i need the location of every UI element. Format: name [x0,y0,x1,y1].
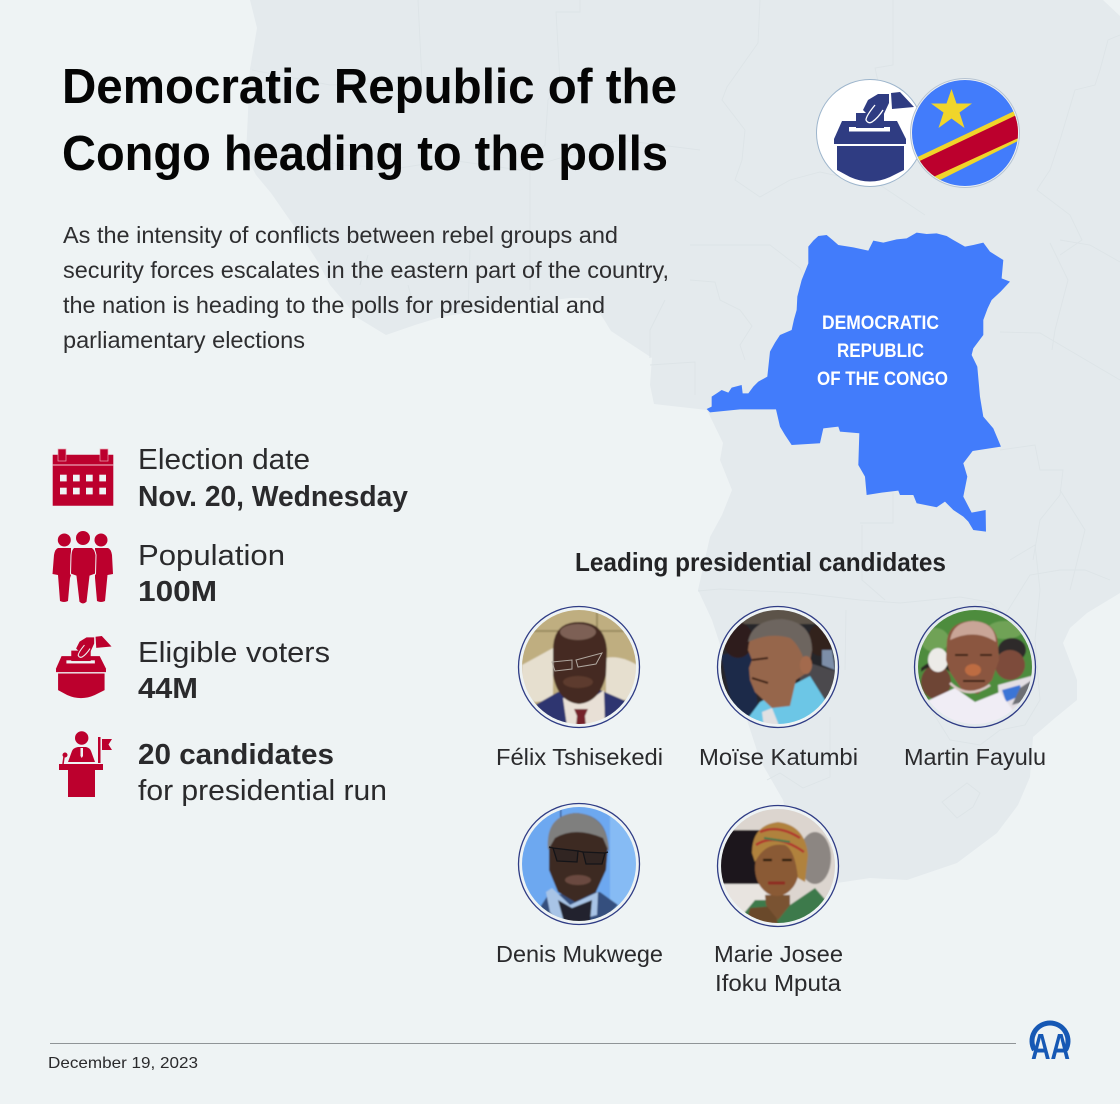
intro paragraph: security forces escalates in the eastern part of the country, [63,257,669,283]
stat: presidential candidates [59,731,387,807]
icon: ballot box [56,636,112,698]
candidate: Marie Josee Ifoku Mputa: Marie Josee [714,941,843,967]
stat: election date: Nov. 20, Wednesday [138,481,408,513]
icon: calendar [53,449,113,506]
stat: population: Population [138,540,285,572]
title [62,60,677,181]
candidate: Félix Tshisekedi: Félix Tshisekedi [496,744,663,770]
stat: population [52,531,285,608]
candidate: Félix Tshisekedi [496,606,663,770]
portrait [914,606,1036,728]
intro paragraph: the nation is heading to the polls for presidential and [63,292,605,318]
portrait [718,806,838,926]
stat: eligible voters: Eligible voters [138,637,330,669]
map label [817,313,948,390]
stat: eligible voters: 44M [138,673,198,705]
candidate: Marie Josee Ifoku Mputa: Ifoku Mputa [715,970,841,996]
background map of Africa [246,0,1120,883]
map label: REPUBLIC [837,341,924,362]
portrait [518,804,640,925]
map label: DEMOCRATIC [822,313,939,334]
stat: presidential candidates: for presidential run [138,775,387,807]
map: Democratic Republic of the Congo [707,233,1010,532]
candidate: Denis Mukwege: Denis Mukwege [496,941,663,967]
stat: presidential candidates: 20 candidates [138,739,334,771]
icon: speaker at podium [59,731,112,797]
icon: DRC flag badge [910,78,1020,188]
portrait [518,606,640,730]
stat: election date: Election date [138,444,310,476]
portrait [718,606,838,730]
stat: population: 100M [138,576,217,608]
intro paragraph: parliamentary elections [63,327,305,353]
map label: OF THE CONGO [817,369,948,390]
footer divider [50,1043,1016,1044]
title: Congo heading to the polls [62,127,668,181]
icon: people [52,531,113,604]
intro paragraph: As the intensity of conflicts between rebel groups and [63,222,618,248]
candidate: Moïse Katumbi [699,606,858,770]
heading: leading presidential candidates: Leading presidential candidates [575,547,946,577]
footer date: December 19, 2023 [48,1055,198,1072]
candidate: Martin Fayulu: Martin Fayulu [904,744,1046,770]
candidate: Moïse Katumbi: Moïse Katumbi [699,744,858,770]
candidate: Marie Josee Ifoku Mputa [714,806,843,996]
logo: Anadolu Agency: AA [1031,1026,1070,1067]
candidate: Denis Mukwege [496,804,663,967]
icon: ballot box badge [816,80,924,186]
candidate: Martin Fayulu [904,606,1046,770]
stat: election date [53,444,408,513]
intro paragraph [63,222,669,353]
title: Democratic Republic of the [62,60,677,114]
stat: eligible voters [56,636,330,705]
